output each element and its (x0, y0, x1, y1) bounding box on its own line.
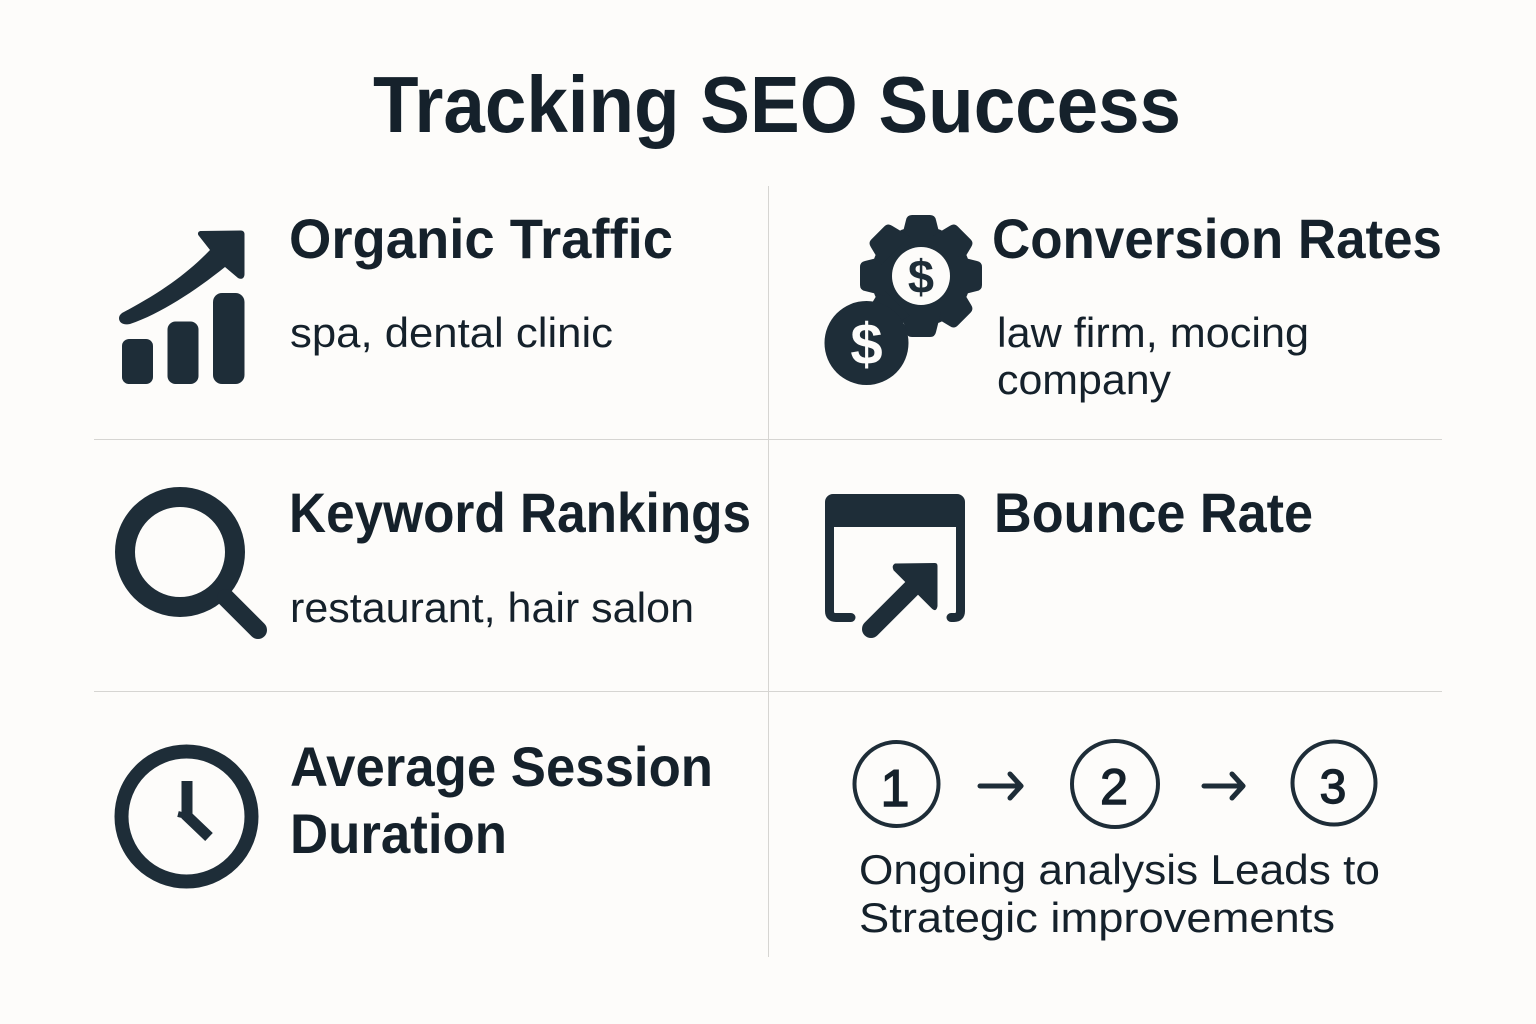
step 1: 1 (881, 760, 909, 818)
heading: Average Session (290, 735, 713, 798)
panel: conversion rates (824, 207, 1442, 403)
heading: Bounce Rate (994, 481, 1313, 544)
icon: rising bar chart with arrow (119, 230, 244, 384)
arrow 1 to 2 (980, 774, 1021, 798)
process caption (859, 846, 1380, 941)
process caption: Ongoing analysis Leads to (859, 846, 1380, 893)
step 2 (1072, 741, 1158, 827)
heading: Keyword Rankings (289, 481, 751, 544)
icon: gear and dollar coin (824, 215, 982, 385)
panel: keyword rankings (125, 481, 751, 631)
icon: magnifying glass (125, 497, 258, 630)
panel: average session duration (122, 735, 713, 882)
heading: Conversion Rates (992, 207, 1442, 270)
examples text: company (997, 356, 1171, 403)
heading (290, 735, 713, 865)
process caption: Strategic improvements (859, 894, 1335, 941)
icon: browser window with exit arrow (825, 494, 965, 629)
step 2: 2 (1100, 759, 1128, 815)
panel: bounce rate (825, 481, 1313, 629)
step 3: 3 (1320, 761, 1346, 814)
panel: ongoing analysis process (854, 741, 1380, 941)
icon: gear and dollar coin: $ (908, 250, 934, 303)
examples text (997, 309, 1309, 403)
panel: organic traffic (119, 207, 673, 384)
heading: Duration (290, 802, 507, 865)
step 1 (854, 742, 938, 826)
title: Tracking SEO Success (373, 60, 1181, 149)
examples text: restaurant, hair salon (290, 584, 694, 631)
examples text: law firm, mocing (997, 309, 1309, 356)
step 3 (1292, 742, 1376, 824)
icon: gear and dollar coin: $ (850, 312, 883, 377)
icon: clock (122, 752, 252, 882)
heading: Organic Traffic (289, 207, 673, 270)
examples text: spa, dental clinic (290, 309, 613, 356)
arrow 2 to 3 (1204, 774, 1243, 798)
